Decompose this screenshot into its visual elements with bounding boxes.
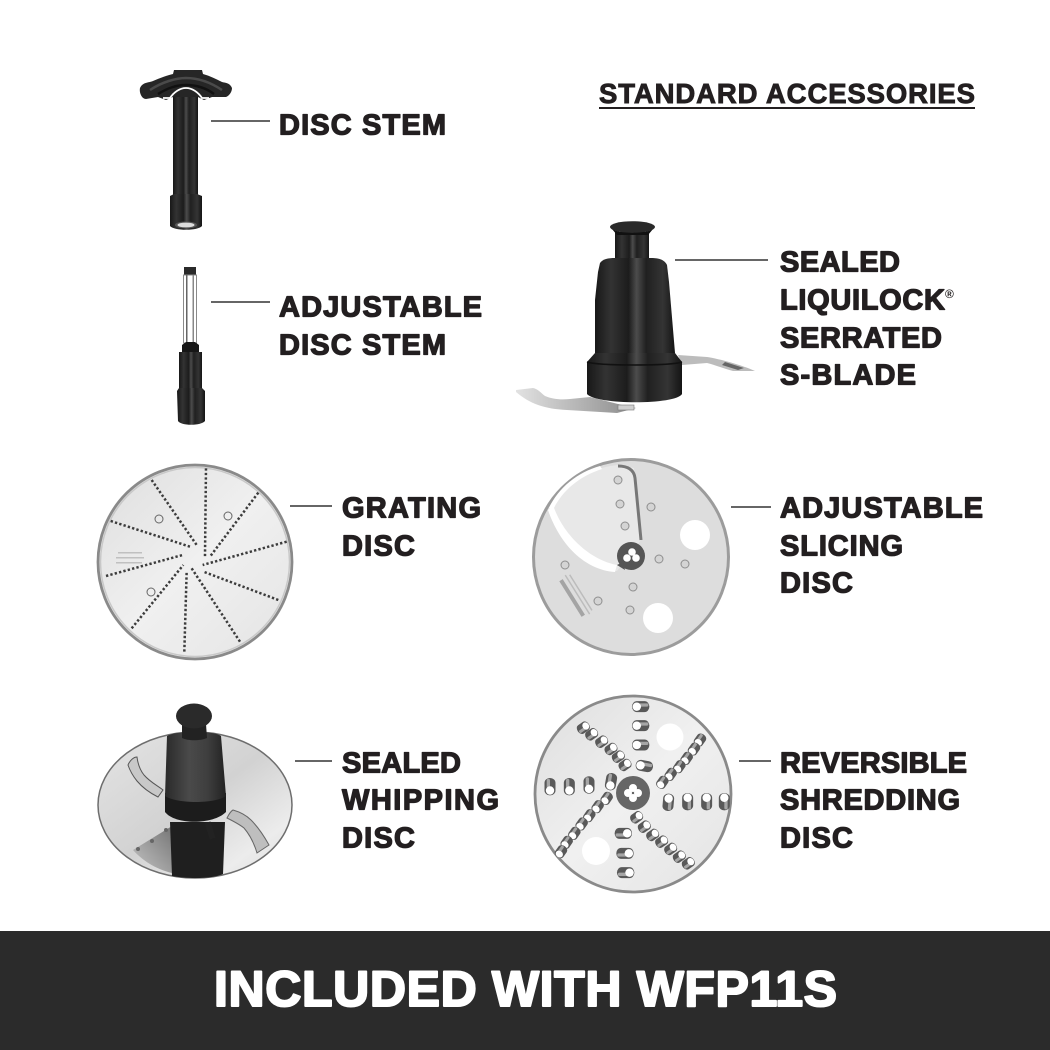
label: grating disc: GRATING — [342, 492, 481, 524]
label: grating disc — [342, 492, 481, 562]
leader line: adjustable disc stem — [211, 301, 270, 303]
label: adjustable disc stem — [279, 292, 482, 362]
leader line: grating disc — [290, 505, 332, 507]
leader line: sealed whipping disc — [295, 760, 332, 762]
icon: disc stem — [140, 70, 232, 230]
leader line: reversible shredding disc — [739, 760, 771, 762]
label: adjustable slicing disc: ADJUSTABLE — [780, 492, 983, 524]
label: reversible shredding disc: SHREDDING — [780, 784, 960, 816]
label: reversible shredding disc: DISC — [780, 822, 853, 854]
icon: adjustable disc stem — [177, 267, 205, 425]
label: sealed whipping disc: DISC — [342, 822, 415, 854]
label: adjustable disc stem: ADJUSTABLE — [279, 292, 482, 324]
icon: reversible shredding disc — [535, 696, 731, 892]
label: sealed whipping disc: SEALED — [342, 748, 461, 780]
footer banner — [0, 931, 1050, 1050]
icon: grating disc — [98, 465, 292, 659]
icon: adjustable slicing disc — [534, 460, 728, 654]
label: grating disc: DISC — [342, 530, 415, 562]
label: adjustable disc stem: DISC STEM — [279, 330, 446, 362]
label: sealed liquilock serrated s-blade: SERRATED — [780, 322, 942, 354]
label: disc stem: DISC STEM — [279, 110, 446, 142]
label: reversible shredding disc — [780, 748, 967, 854]
label: sealed liquilock serrated s-blade: S-BLADE — [780, 360, 916, 392]
label: sealed liquilock serrated s-blade: SEALED — [780, 246, 900, 278]
leader line: adjustable slicing disc — [731, 506, 771, 508]
label: reversible shredding disc: REVERSIBLE — [780, 748, 967, 780]
label: sealed liquilock serrated s-blade: LIQUILOCK — [780, 284, 945, 316]
label: adjustable slicing disc: SLICING — [780, 530, 903, 562]
leader line: s-blade — [675, 259, 768, 261]
section heading: standard accessories: STANDARD ACCESSORIES — [599, 78, 975, 109]
label: adjustable slicing disc: DISC — [780, 568, 853, 600]
leader line: disc stem — [211, 120, 270, 122]
label: adjustable slicing disc — [780, 492, 983, 600]
label: sealed whipping disc — [342, 748, 499, 854]
label: sealed whipping disc: WHIPPING — [342, 784, 499, 816]
icon: sealed whipping disc — [98, 704, 292, 878]
label: sealed liquilock serrated s-blade: ® — [945, 287, 954, 301]
label: sealed liquilock serrated s-blade — [780, 246, 954, 392]
icon: sealed liquilock serrated s-blade — [516, 221, 755, 413]
footer banner: INCLUDED WITH WFP11S — [214, 961, 837, 1017]
